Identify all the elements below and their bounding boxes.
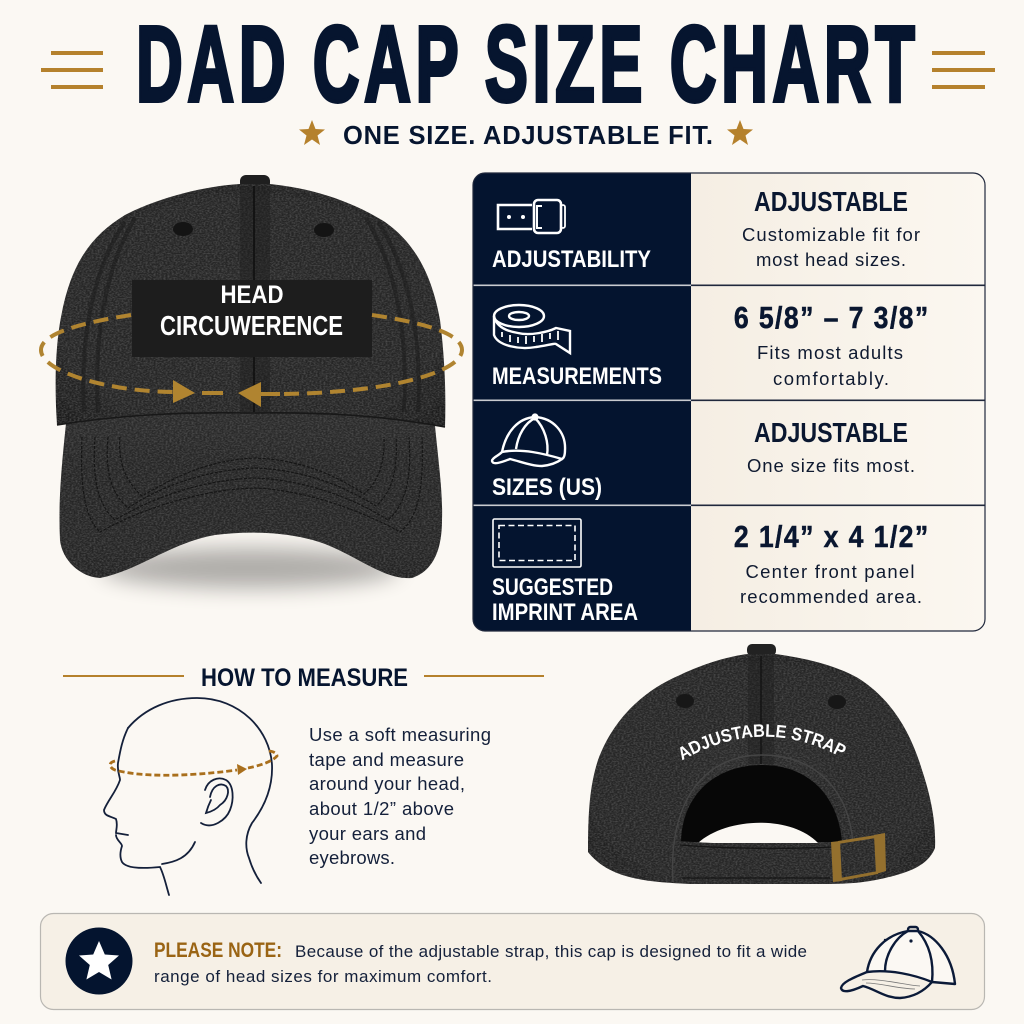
row: sizes: SIZES (US) <box>492 474 602 501</box>
row: suggested imprint area: IMPRINT AREA <box>492 599 638 626</box>
size table <box>473 173 985 631</box>
how to measure instructions: Use a soft measuring <box>309 724 491 745</box>
subtitle: ONE SIZE. ADJUSTABLE FIT. <box>343 122 713 150</box>
how to measure heading: HOW TO MEASURE <box>201 664 408 692</box>
row: sizes: ADJUSTABLE <box>754 417 908 448</box>
measurement arrows <box>41 315 462 407</box>
how to measure instructions <box>309 724 491 868</box>
icon: belt buckle <box>498 200 565 233</box>
decoration: right title lines <box>932 51 995 89</box>
row: measurements <box>492 301 928 390</box>
brass buckle <box>831 833 886 882</box>
note panel: PLEASE NOTE: <box>154 939 282 962</box>
front cap photo <box>41 175 462 588</box>
note panel <box>40 914 984 1010</box>
how to measure instructions: eyebrows. <box>309 847 395 868</box>
row: suggested imprint area <box>492 519 928 626</box>
row: suggested imprint area: recommended area. <box>740 586 922 607</box>
icon: imprint rectangle <box>493 519 581 567</box>
row: adjustability: Customizable fit for <box>742 224 920 245</box>
how to measure instructions: around your head, <box>309 773 465 794</box>
row: measurements: Fits most adults <box>757 342 903 363</box>
how to measure instructions: about 1/2” above <box>309 798 454 819</box>
row: adjustability: ADJUSTABLE <box>754 186 908 217</box>
row: adjustability: ADJUSTABILITY <box>492 246 651 273</box>
row: measurements: 6 5/8” – 7 3/8” <box>734 301 928 336</box>
row: suggested imprint area: Center front panel <box>746 561 914 582</box>
row: suggested imprint area: SUGGESTED <box>492 574 613 601</box>
head diagram <box>104 698 277 895</box>
how to measure instructions: tape and measure <box>309 749 464 770</box>
head circumference label patch <box>132 280 372 357</box>
decoration: left title lines <box>41 51 103 89</box>
icon: cap outline <box>492 415 565 466</box>
curved strap label: ADJUSTABLE STRAP <box>680 724 846 760</box>
title: DAD CAP SIZE CHART <box>136 3 915 124</box>
how to measure instructions: your ears and <box>309 823 426 844</box>
icon: measuring tape <box>494 305 570 353</box>
icon: cap line drawing <box>841 927 955 998</box>
back cap photo <box>588 644 936 884</box>
row: measurements: MEASUREMENTS <box>492 363 662 390</box>
row: adjustability: most head sizes. <box>756 249 906 270</box>
head circumference label patch: HEAD <box>220 281 284 309</box>
row: sizes <box>492 415 915 501</box>
row: measurements: comfortably. <box>773 368 889 389</box>
icon: star badge <box>66 928 132 994</box>
row: sizes: One size fits most. <box>747 455 915 476</box>
note panel: Because of the adjustable strap, this cap is designed to fit a wide <box>295 942 807 961</box>
head circumference label patch: CIRCUWERENCE <box>160 310 343 341</box>
row: suggested imprint area: 2 1/4” x 4 1/2” <box>734 520 928 555</box>
row: adjustability <box>492 186 920 273</box>
note panel: range of head sizes for maximum comfort. <box>154 967 492 986</box>
